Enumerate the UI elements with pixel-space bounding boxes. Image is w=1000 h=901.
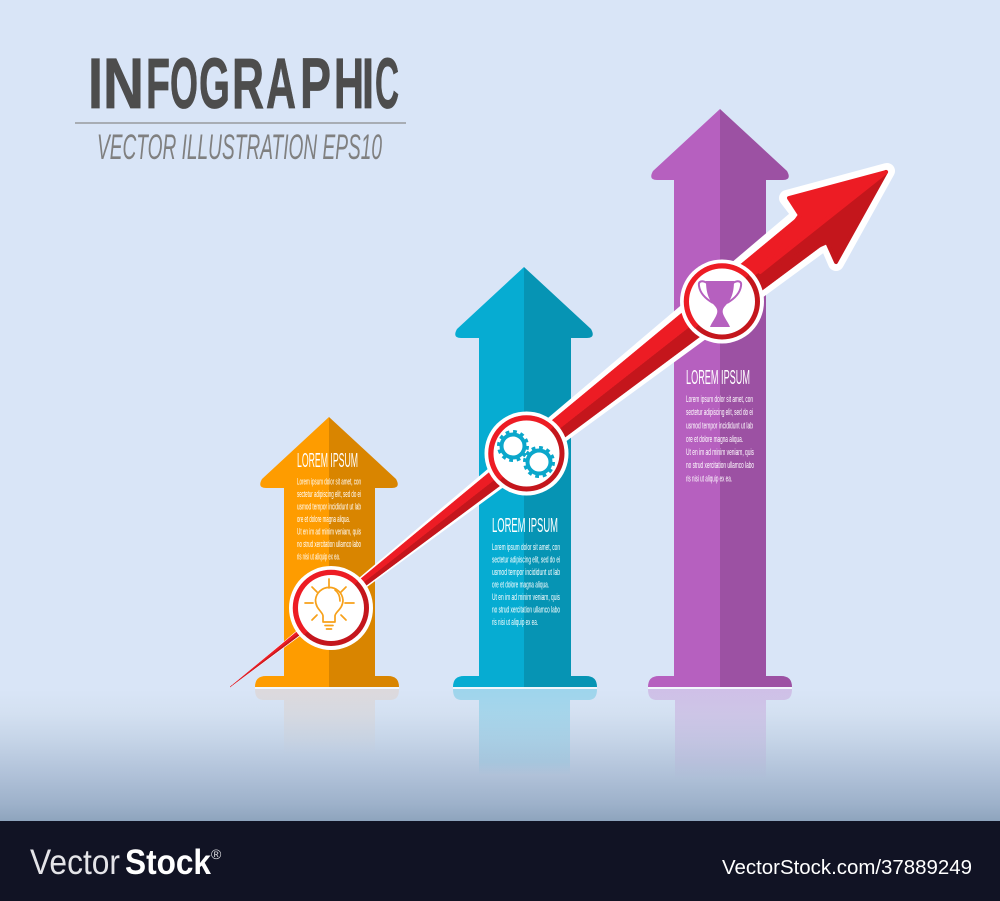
blue text block: no strud xercitation ullamco labo [492,604,560,614]
badge: trophy [680,260,764,344]
title [88,45,399,124]
footer logo: Vector [30,843,120,882]
orange arrow shape [255,417,399,689]
orange text block: ris nisi ut aliquip ex ea. [297,552,340,562]
blue text block: usmod tempor incididunt ut lab [492,567,560,577]
icon: trophy [699,281,741,327]
orange text block: sectetur adipiscing elit, sed do ei [297,489,361,499]
reflection: blue [453,689,597,775]
panel: purple arrow [648,109,792,689]
title: R [232,45,264,124]
panel: blue arrow [453,267,597,689]
orange text block: Ut en im ad minim veniam, quis [297,526,361,536]
footer logo: Stock [125,843,211,882]
purple arrow shape [648,109,792,689]
blue text block: sectetur adipiscing elit, sed do ei [492,554,560,564]
orange text block: ore et dolore magna aliqua. [297,514,350,524]
purple text block: usmod tempor incididunt ut lab [686,420,753,430]
title: I [88,45,103,124]
blue text block: ris nisi ut aliquip ex ea. [492,617,538,627]
orange text block [297,450,361,562]
reflection: orange [255,689,399,755]
orange text block: Lorem ipsum dolor sit amet, con [297,476,361,486]
panel: orange arrow [255,417,399,689]
title: O [170,45,198,124]
subtitle: VECTOR ILLUSTRATION EPS10 [97,128,382,167]
footer bar [0,821,1000,901]
panel: orange arrow: LOREM IPSUM [297,450,358,472]
icon: gears [498,432,554,476]
purple text block: Ut en im ad minim veniam, quis [686,447,754,457]
purple text block [686,367,754,484]
purple text block: sectetur adipiscing elit, sed do ei [686,407,753,417]
badge: light bulb [289,566,373,650]
orange text block: usmod tempor incididunt ut lab [297,502,361,512]
footer logo [30,843,222,882]
title: P [300,45,331,124]
blue text block: Lorem ipsum dolor sit amet, con [492,542,560,552]
purple text block: ris nisi ut aliquip ex ea. [686,474,732,484]
blue text block [492,515,560,627]
blue text block: ore et dolore magna aliqua. [492,580,549,590]
title: N [103,45,144,124]
blue arrow shape [453,267,597,689]
badge: gears [484,412,568,496]
red growth arrow [229,171,888,688]
footer logo: ® [211,846,222,862]
title block: C [375,45,399,124]
title: A [266,45,296,124]
purple text block: no strud xercitation ullamco labo [686,460,754,470]
purple text block: Lorem ipsum dolor sit amet, con [686,394,753,404]
panel: blue arrow: LOREM IPSUM [492,515,558,537]
footer image id: VectorStock.com/37889249 [722,857,972,879]
icon: light bulb [305,579,354,629]
title: G [199,45,230,124]
title: H [334,45,364,124]
panel: purple arrow: LOREM IPSUM [686,367,750,389]
title: F [146,45,170,124]
blue text block: Ut en im ad minim veniam, quis [492,592,560,602]
reflection: purple [648,689,792,780]
purple text block: ore et dolore magna aliqua. [686,434,743,444]
title block [75,45,406,167]
orange text block: no strud xercitation ullamco labo [297,539,361,549]
title: I [362,45,374,124]
